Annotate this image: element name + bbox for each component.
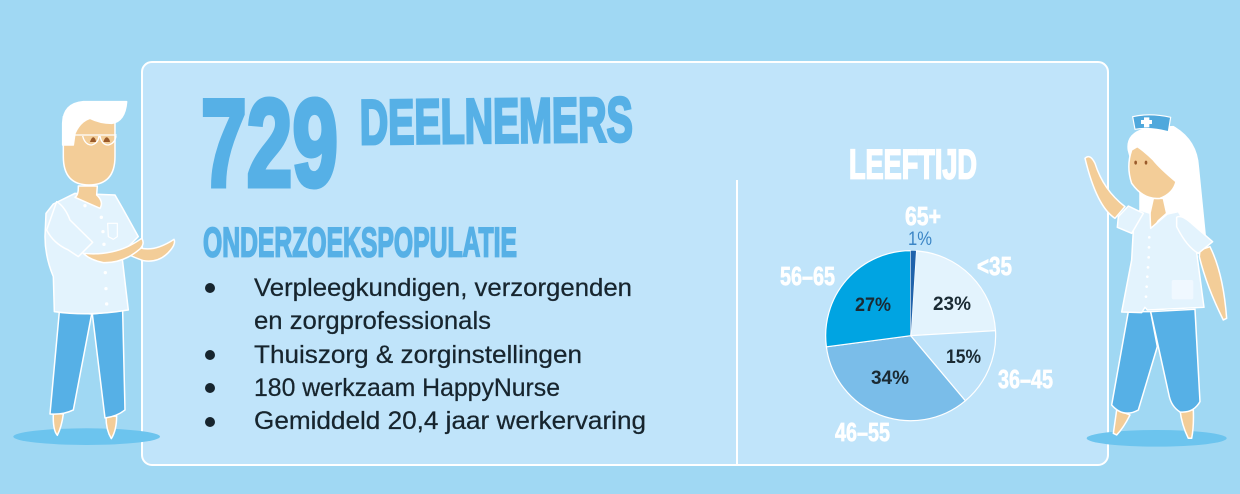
pie category labels: 56–65: [780, 261, 835, 291]
pie value labels: 27%: [855, 295, 891, 316]
pie category labels: 36–45: [998, 364, 1053, 394]
character: nurse: [1085, 115, 1227, 447]
bullet list: en zorgprofessionals: [254, 307, 491, 335]
pie category labels: 46–55: [835, 417, 890, 447]
pie label 1 percent: 1%: [908, 229, 932, 250]
pie value labels: 23%: [933, 294, 971, 315]
pie category labels: <35: [977, 251, 1012, 281]
pie value labels: [855, 294, 981, 389]
pie category labels: 65+: [905, 201, 941, 231]
heading: onderzoekspopulatie: ONDERZOEKSPOPULATIE: [203, 218, 517, 266]
bullet list: Thuiszorg & zorginstellingen: [254, 341, 582, 369]
pie chart: age: [826, 251, 996, 421]
bullet list: 180 werkzaam HappyNurse: [254, 374, 560, 402]
heading: leeftijd: LEEFTIJD: [849, 140, 977, 188]
pie value labels: 15%: [946, 347, 981, 368]
bullet list: Verpleegkundigen, verzorgenden: [254, 274, 632, 302]
panel: main card: [142, 62, 1108, 465]
heading: deelnemers: DEELNEMERS: [359, 85, 633, 158]
pie category labels: [780, 201, 1053, 447]
character: male doctor: [13, 102, 175, 445]
bullet list: [205, 274, 646, 435]
bullet list: Gemiddeld 20,4 jaar werkervaring: [254, 407, 646, 435]
pie value labels: 34%: [871, 368, 909, 389]
big number 729: 729: [201, 75, 338, 213]
